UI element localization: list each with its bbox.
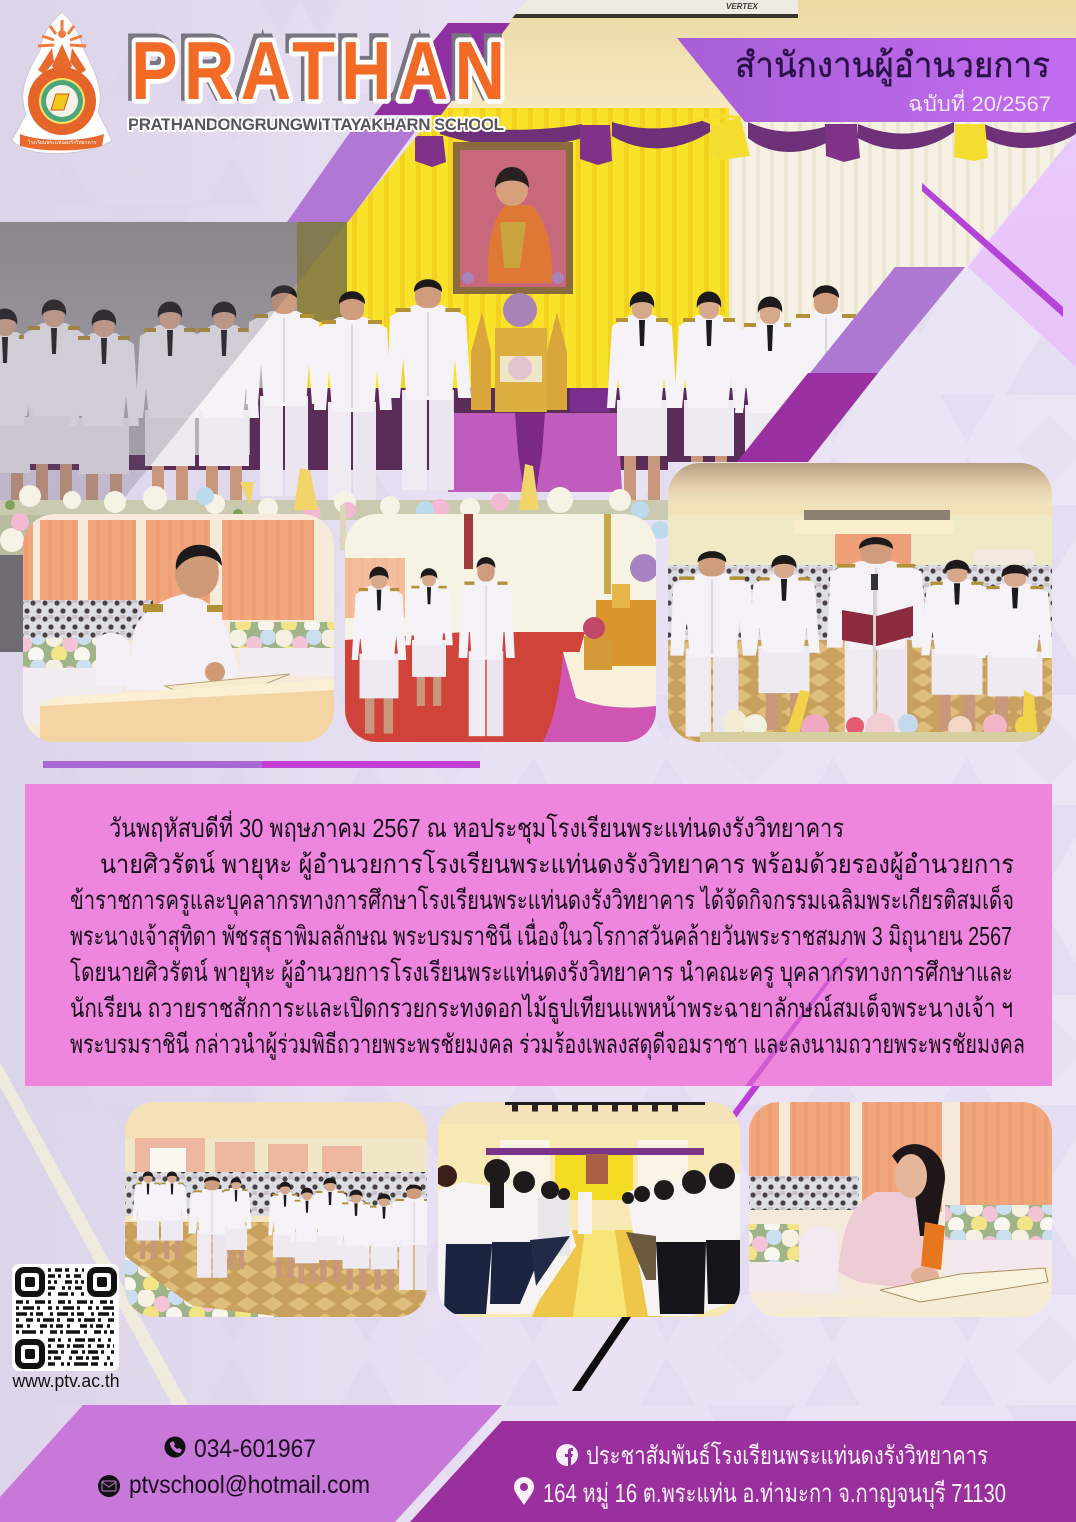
text: phone number: 034-601967 (194, 1435, 316, 1463)
photo: director reads vow (668, 463, 1054, 743)
decorative diagonal bands: top purple (287, 23, 510, 222)
photo: student signing book (749, 1102, 1052, 1317)
portrait frame (453, 142, 573, 294)
text: full school name: PRATHANDONGRUNGWITTAYAKHARN SCHOOL (128, 115, 504, 134)
red book (842, 606, 913, 646)
hero photo: ceremony stage (0, 0, 1076, 652)
icon: location pin (514, 1477, 534, 1505)
icon: facebook (556, 1444, 578, 1466)
photo: students facing stage (435, 1102, 740, 1317)
curtain swags (440, 118, 1076, 152)
text: public relations: ประชาสัมพันธ์โรงเรียนพระแท่นดงรังวิทยาคาร (586, 1441, 988, 1470)
shrine and table (448, 293, 622, 493)
school name logotype (128, 22, 505, 134)
golden altar (563, 514, 658, 712)
decorative line: purple lower diagonal (725, 1086, 760, 1122)
decorative diagonal: cream line (0, 1062, 190, 1408)
footer: dark contact band (410, 1421, 1076, 1522)
group of officials (670, 537, 1054, 737)
divider bar (43, 761, 480, 768)
text: paragraph line 1: วันพฤหัสบดีที่ 30 พฤษภาคม 2567 ณ หอประชุมโรงเรียนพระแท่นดงรังวิทยาคาร (109, 810, 844, 844)
decorative bands: right purple parallelogram (737, 267, 965, 462)
flower row (0, 464, 669, 555)
logo emblem (12, 12, 112, 154)
photo: director signing book (23, 514, 334, 742)
text: issue number: ฉบับที่ 20/2567 (908, 89, 1051, 116)
text: air conditioner brand: VERTEX (726, 2, 759, 11)
photo: offering flowers (345, 514, 658, 742)
people: officials in white (0, 279, 866, 518)
footer: light contact band (0, 1405, 502, 1522)
students right (622, 1163, 740, 1316)
students left (435, 1159, 576, 1314)
text: website: www.ptv.ac.th (12, 1370, 119, 1391)
figure: director (126, 545, 240, 690)
text: office title: สำนักงานผู้อำนวยการ (735, 46, 1050, 86)
decorative line: black diagonal (572, 1317, 631, 1391)
text: PRATHAN: PRATHAN (128, 22, 502, 114)
photo: assembly hall (125, 1102, 439, 1317)
text: emblem ribbon: โรงเรียนพระแท่นดงรังวิทยาคาร (28, 139, 97, 146)
icon: phone (164, 1436, 186, 1458)
panel: description text (25, 784, 1052, 1086)
decorative line: purple diagonal (922, 183, 1063, 317)
QR code (12, 1264, 119, 1391)
header ribbon (677, 38, 1076, 122)
text: PRATHAN: PRATHAN (131, 26, 505, 117)
figure: student (838, 1144, 945, 1290)
decorative shape: light lilac right (968, 133, 1076, 367)
rows of teachers (133, 1171, 439, 1290)
grey translucent overlay (0, 222, 346, 500)
text: email: ptvschool@hotmail.com (129, 1471, 370, 1499)
dark stage backdrop (30, 388, 866, 470)
icon: mail (98, 1475, 120, 1497)
